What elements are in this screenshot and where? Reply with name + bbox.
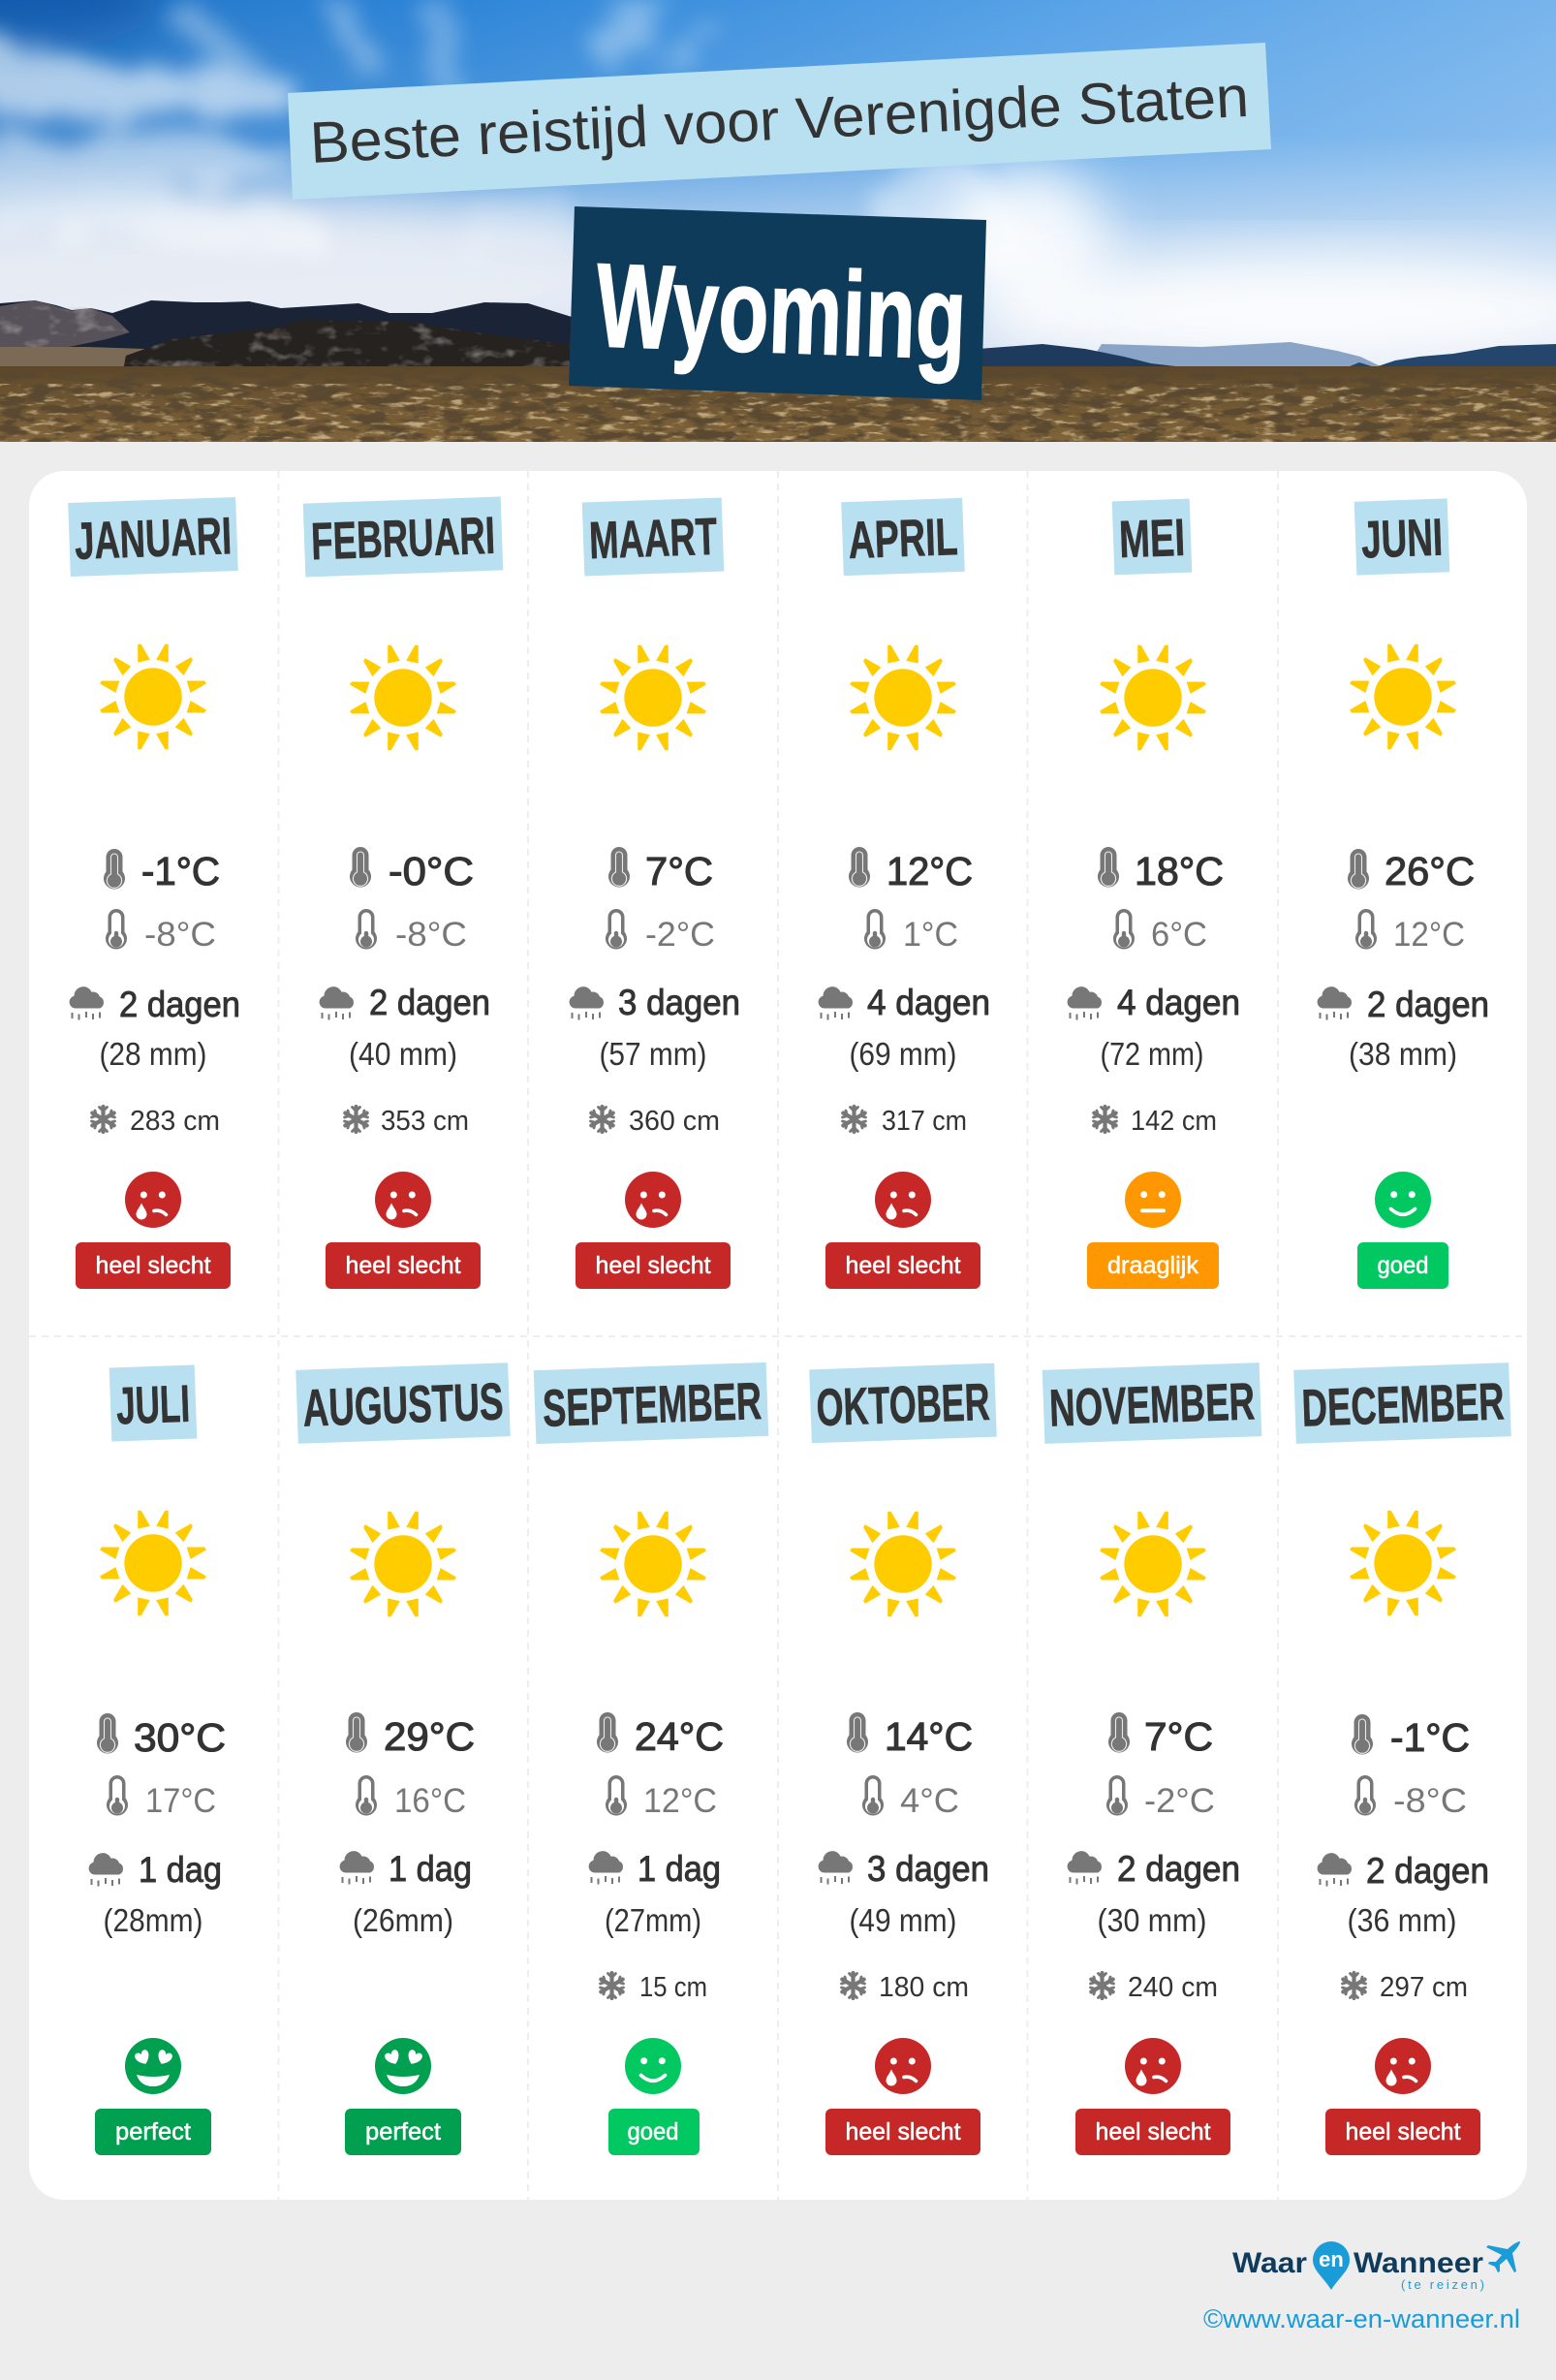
rating: goed: goed [628,2118,678,2145]
min temperature [106,909,216,954]
month: maart [570,498,740,1289]
icon: sun [600,645,706,750]
min temperature: 12°C [1393,916,1465,954]
icon: plane [1486,2241,1520,2272]
min temperature: 12°C [643,1782,717,1820]
icon: sun [350,645,456,750]
source url: ©www.waar-en-wanneer.nl [1203,2304,1520,2333]
month label: SEPTEMBER [542,1372,762,1438]
rain days: (40 mm) [349,1036,457,1072]
rain days: (36 mm) [1347,1902,1457,1938]
rain days: (26mm) [353,1902,453,1938]
snowfall [1093,1106,1217,1137]
rating: heel slecht [825,2038,980,2155]
month label [841,498,965,576]
month label [303,496,503,578]
max temperature: 30°C [134,1715,226,1760]
snowfall [1091,1972,1218,2003]
max temperature: 7°C [645,849,713,893]
max temperature [104,849,220,893]
month label: OKTOBER [816,1373,991,1437]
min temperature [356,1775,466,1820]
rain days [320,983,490,1072]
min temperature [1106,1775,1215,1820]
month label [1043,1362,1261,1444]
snowfall: 142 cm [1131,1106,1217,1137]
month label [534,1362,768,1444]
rating: heel slecht: heel slecht [345,1252,461,1279]
month label [296,1362,511,1444]
month label: NOVEMBER [1048,1372,1256,1438]
rain days [1068,1849,1240,1938]
rating: heel slecht: heel slecht [845,2118,961,2145]
month label: MAART [588,508,718,570]
rating: perfect: perfect [365,2118,441,2145]
snowfall [843,1106,967,1137]
logo: Waar en Wanneer: (te reizen) [1401,2277,1484,2292]
snowfall [841,1972,969,2003]
month label [1293,1362,1511,1444]
max temperature: 18°C [1135,849,1224,893]
rating: heel slecht [1325,2038,1480,2155]
snowfall [591,1106,720,1137]
min temperature [1113,909,1207,954]
rain days: 2 dagen [1366,1851,1489,1891]
max temperature [1352,1714,1470,1760]
rain days: 3 dagen [867,1849,989,1889]
title ribbon: Beste reistijd voor Verenigde Staten [308,64,1250,175]
snowfall: 360 cm [629,1106,720,1137]
month label: APRIL [848,508,959,570]
max temperature: 29°C [384,1714,475,1759]
rating: heel slecht: heel slecht [845,1252,961,1279]
rating: goed: goed [1378,1252,1428,1279]
rating: heel slecht [326,1172,481,1289]
max temperature [1098,847,1224,893]
icon: sun [1100,645,1206,750]
month label [809,1363,997,1443]
rain days [819,1849,989,1938]
rain days: 2 dagen [119,985,240,1024]
logo: Waar en Wanneer: Waar [1232,2247,1307,2279]
snowfall: 180 cm [879,1972,969,2003]
rating: draaglijk: draaglijk [1107,1252,1198,1279]
header photo: Wyoming landscape [0,0,1556,442]
rain days: (57 mm) [599,1036,707,1072]
month: oktober [809,1363,997,2155]
month label [1354,498,1449,576]
snowfall: 283 cm [130,1106,220,1137]
logo: Waar en Wanneer [1232,2241,1520,2292]
max temperature: 26°C [1385,849,1475,893]
max temperature: 7°C [1144,1714,1213,1759]
min temperature [606,909,715,954]
ground [0,366,1556,442]
snowfall [91,1106,220,1137]
month: december [1293,1362,1511,2155]
month label [582,498,724,576]
month: september [534,1362,768,2155]
rain days [340,1849,472,1938]
rain days: (30 mm) [1097,1902,1207,1938]
max temperature: 24°C [635,1714,724,1759]
month: augustus [296,1362,511,2155]
rating: heel slecht: heel slecht [95,1252,211,1279]
icon: sun [1350,644,1456,749]
min temperature [356,909,467,954]
logo: Waar en Wanneer: Wanneer [1354,2247,1483,2279]
min temperature: -8°C [1393,1782,1467,1820]
month: januari [68,497,240,1289]
min temperature: 4°C [900,1782,959,1820]
max temperature: 12°C [887,849,973,893]
month label: JUNI [1360,509,1444,569]
icon: sun [350,1512,456,1616]
rain days: 1 dag [139,1850,222,1890]
max temperature: 14°C [885,1714,973,1759]
min temperature: -8°C [395,916,467,954]
max temperature: -0°C [389,849,474,893]
month: juli [89,1364,226,2155]
icon: location pin [1313,2241,1350,2290]
rain days: (72 mm) [1101,1036,1203,1072]
max temperature [1348,849,1475,893]
min temperature: 16°C [394,1782,466,1820]
month label [109,1364,197,1442]
rating: heel slecht [576,1172,731,1289]
snowfall: 317 cm [882,1106,967,1137]
distant mountains right [1097,342,1380,366]
month: november [1043,1362,1261,2155]
panel: calendar card [29,471,1527,2200]
rating: perfect [345,2038,461,2155]
min temperature: 1°C [903,916,958,954]
rating: perfect: perfect [115,2118,191,2145]
snowfall [601,1972,707,2003]
rain days: 4 dagen [1117,983,1240,1022]
min temperature [1355,909,1465,954]
min temperature: 17°C [145,1782,216,1820]
snowfall: 297 cm [1380,1972,1468,2003]
month label [68,497,238,577]
min temperature: -2°C [1144,1782,1215,1820]
rain days [1318,985,1489,1072]
max temperature: -1°C [141,849,220,893]
month label: JULI [115,1375,191,1435]
snowfall: 15 cm [639,1972,707,2003]
rating: heel slecht: heel slecht [1095,2118,1211,2145]
dark mountains left [0,300,572,349]
rain days: (49 mm) [849,1902,957,1938]
rain days [70,985,240,1072]
rain days: (28 mm) [99,1036,207,1072]
max temperature [849,847,973,893]
rain days [819,983,990,1072]
rain days: (28mm) [103,1902,203,1938]
rain days: 3 dagen [618,983,740,1022]
min temperature [1354,1775,1467,1820]
month: april [819,498,990,1289]
max temperature [597,1712,724,1759]
rain days: 4 dagen [867,983,990,1022]
rain days: 1 dag [389,1849,472,1889]
rain days: 1 dag [638,1849,721,1889]
month: februari [303,496,503,1289]
icon: sun [100,1511,206,1615]
title ribbon [288,43,1271,200]
month label: AUGUSTUS [302,1372,505,1438]
icon: sun [850,645,956,750]
rating: perfect [95,2038,211,2155]
min temperature [107,1775,216,1820]
max temperature [346,1712,475,1759]
rating: heel slecht [825,1172,980,1289]
max temperature [97,1713,226,1760]
min temperature: 6°C [1151,916,1207,954]
rating: goed [608,2038,700,2155]
snowfall: 353 cm [381,1106,469,1137]
month: mei [1068,499,1240,1289]
icon: sun [600,1512,706,1616]
rain days: (69 mm) [849,1036,957,1072]
month: juni [1318,498,1489,1289]
icon: sun [100,644,206,749]
max temperature: -1°C [1390,1715,1470,1760]
icon: sun [850,1512,956,1616]
min temperature [606,1775,717,1820]
snowfall [345,1106,469,1137]
rating: draaglijk [1087,1172,1219,1289]
rain days: 2 dagen [369,983,490,1022]
icon: sun [1100,1512,1206,1616]
rating: goed [1357,1172,1448,1289]
min temperature [864,909,958,954]
rain days [89,1850,222,1938]
icon: location pin: en [1319,2247,1344,2271]
rain days [589,1849,721,1938]
max temperature [350,847,474,893]
min temperature: -2°C [645,916,715,954]
rain days [1318,1851,1489,1938]
state name block [569,206,986,400]
rain days: (27mm) [605,1902,701,1938]
max temperature [608,847,713,893]
max temperature [1108,1712,1213,1759]
rain days: 2 dagen [1367,985,1489,1024]
rating: heel slecht: heel slecht [595,1252,711,1279]
icon: sun [1350,1511,1456,1615]
state name block: Wyoming [594,239,969,385]
min temperature [862,1775,959,1820]
min temperature: -8°C [144,916,216,954]
rating: heel slecht [1075,2038,1230,2155]
rating: heel slecht [76,1172,231,1289]
rain days [1068,983,1240,1072]
snowfall [1343,1972,1468,2003]
max temperature [847,1712,973,1759]
month label: JANUARI [74,507,233,571]
month label: FEBRUARI [310,507,496,571]
rain days: 2 dagen [1117,1849,1240,1889]
month label: MEI [1118,509,1186,569]
rating: heel slecht: heel slecht [1345,2118,1461,2145]
rain days: (38 mm) [1349,1036,1457,1072]
month label [1112,499,1192,575]
rain days [570,983,740,1072]
snowfall: 240 cm [1128,1972,1218,2003]
